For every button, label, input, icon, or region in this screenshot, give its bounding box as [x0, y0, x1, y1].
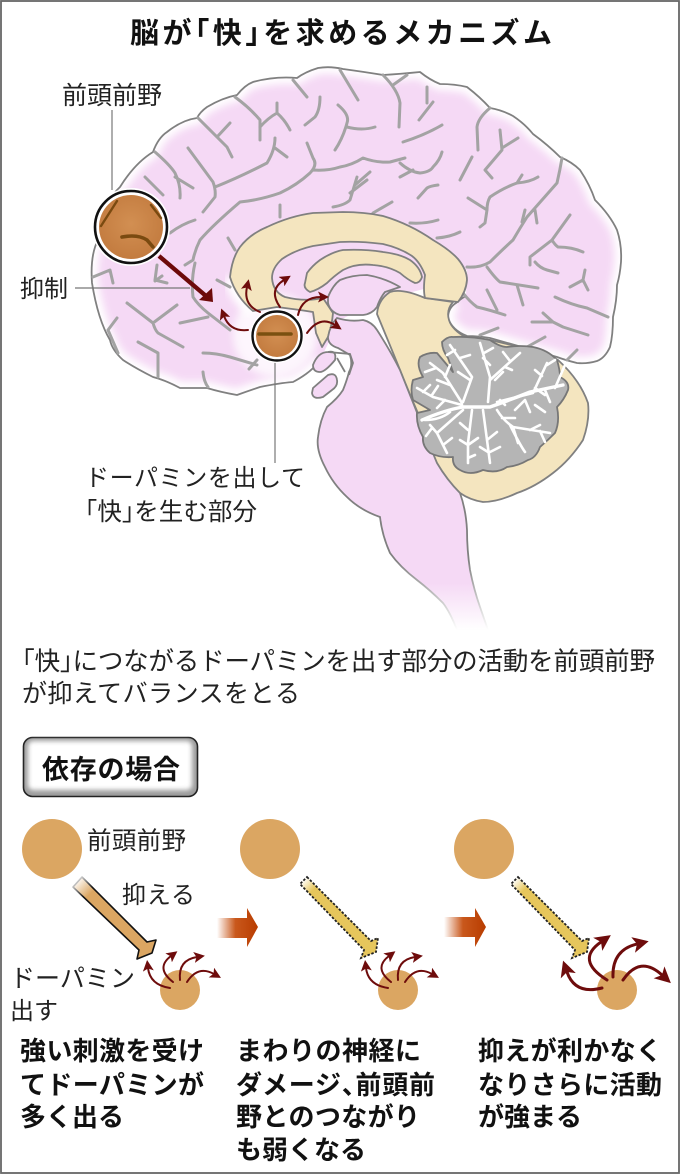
thalamus: [328, 275, 400, 315]
stage 3: [454, 819, 662, 1132]
icon: prefrontal cortex circle: [92, 188, 170, 266]
label: prefrontal: 前頭前野: [87, 827, 186, 855]
label: dopamine region: [85, 465, 305, 526]
description text: [22, 648, 655, 708]
caption: 強い刺激を受け: [20, 1036, 204, 1066]
cerebellum body: [377, 291, 588, 502]
circle: dopamine source: [378, 970, 418, 1010]
label: dopamine release: ドーパミン: [10, 965, 135, 993]
cerebellum arbor: [412, 337, 568, 473]
caption: まわりの神経に: [236, 1036, 421, 1066]
caption: が強まる: [478, 1102, 582, 1132]
label: dopamine region: ドーパミンを出して: [85, 465, 305, 492]
arrow: weakened link: [300, 877, 378, 958]
arrows: dopamine: [148, 956, 214, 988]
arrows: strong dopamine: [567, 942, 662, 990]
caption: 多く出る: [20, 1102, 124, 1132]
circle: prefrontal: [240, 819, 300, 879]
pituitary: [312, 352, 353, 398]
label: suppression: 抑制: [20, 276, 68, 303]
arrow: suppression: [159, 256, 213, 302]
corpus callosum: [230, 212, 467, 347]
description text: 「快」につながるドーパミンを出す部分の活動を前頭前野: [22, 648, 655, 676]
arrow: weakened link: [511, 877, 589, 958]
fornix: [305, 250, 422, 292]
caption: [20, 1036, 204, 1132]
circle: dopamine source: [160, 970, 200, 1010]
stage 2: [236, 819, 435, 1165]
caption: なりさらに活動: [478, 1070, 662, 1100]
arrows: dopamine: [366, 956, 432, 988]
title: 脳が「快」を求めるメカニズム: [130, 16, 552, 50]
description text: が抑えてバランスをとる: [22, 680, 300, 708]
arrow: next stage: [217, 908, 258, 947]
circle: prefrontal: [22, 819, 82, 879]
caption: [236, 1036, 435, 1165]
label: dopamine release: 出す: [10, 998, 58, 1025]
caption: 野とのつながり: [236, 1102, 420, 1132]
caption: も弱くなる: [236, 1135, 366, 1165]
badge: addiction case: [24, 738, 198, 796]
brain stem: [318, 318, 488, 630]
caption: 抑えが利かなく: [478, 1036, 662, 1066]
dopamine arrows: [224, 280, 335, 333]
label: suppress: 抑える: [122, 882, 195, 909]
label: prefrontal cortex: 前頭前野: [62, 82, 162, 110]
cerebrum: [92, 67, 621, 395]
label: dopamine release: [10, 965, 135, 1025]
badge: addiction case: 依存の場合: [42, 755, 180, 785]
connector lines: [75, 110, 275, 463]
circle: prefrontal: [454, 819, 514, 879]
label: dopamine region: 「快」を生む部分: [85, 498, 257, 526]
stage 1: [10, 819, 214, 1132]
arrow: strong suppression: [73, 877, 156, 959]
arrow: next stage: [444, 908, 486, 947]
icon: dopamine source circle: [250, 309, 304, 363]
caption: てドーパミンが: [20, 1070, 204, 1100]
caption: [478, 1036, 662, 1132]
circle: dopamine source: [597, 970, 637, 1010]
caption: ダメージ、前頭前: [236, 1070, 435, 1100]
brain diagram: [75, 67, 621, 630]
